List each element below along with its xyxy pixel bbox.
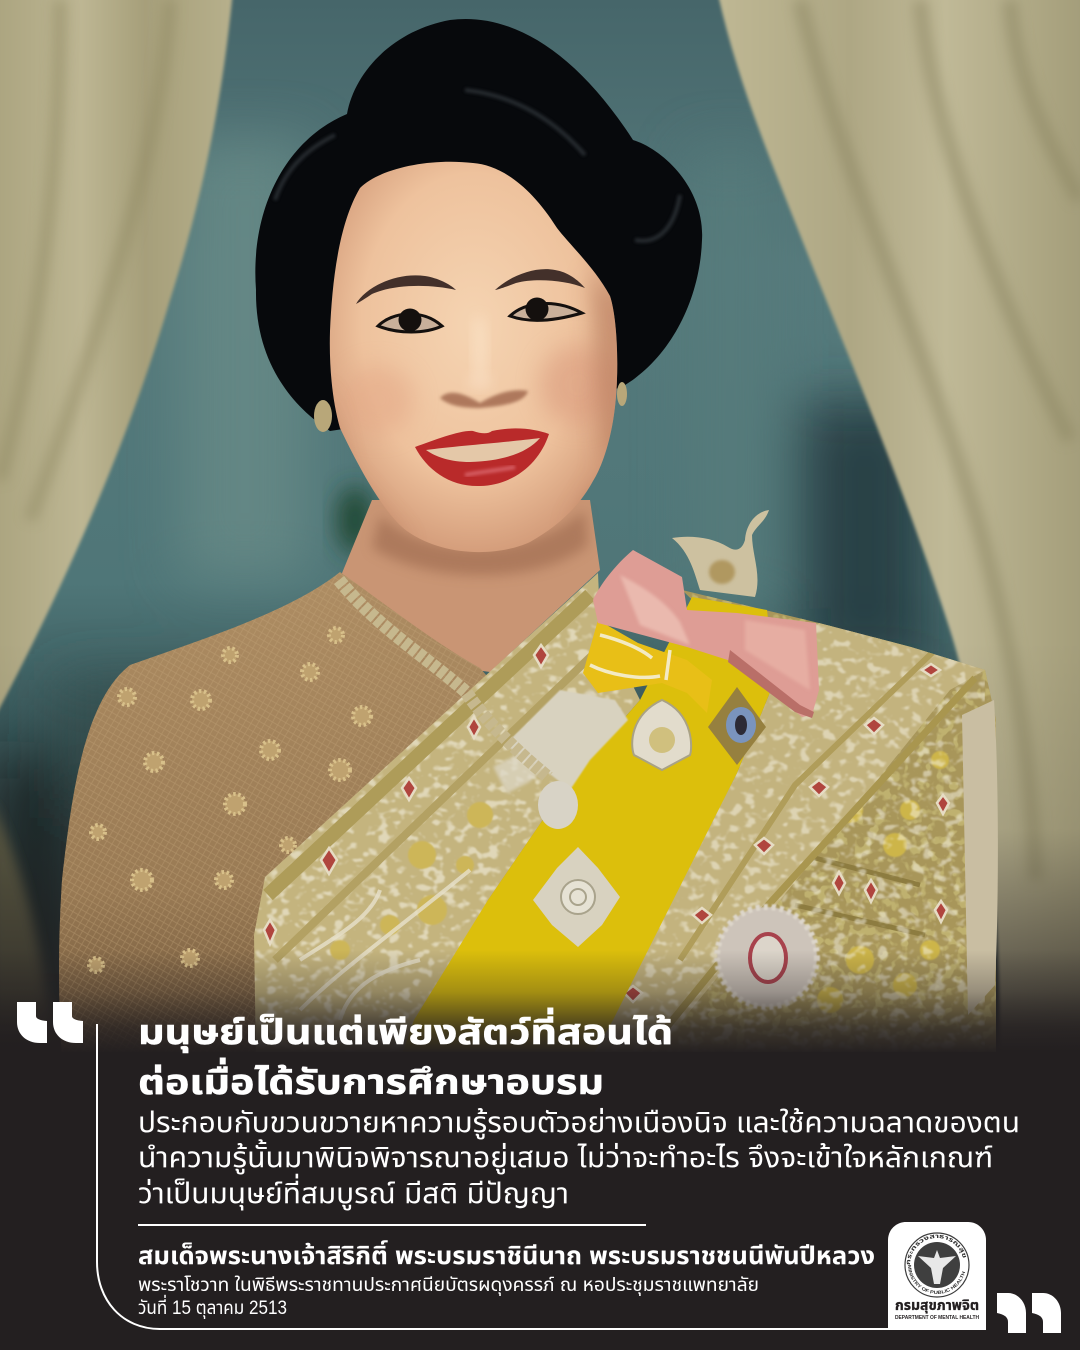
hair: highlights [275,90,680,241]
headline: ต่อเมื่อได้รับการศึกษาอบรม [138,1057,604,1102]
order ribbon: pink bow [593,550,819,717]
logo English name: DEPARTMENT OF MENTAL HEALTH [895,1315,979,1321]
dress: left drape base [254,573,640,1060]
body text [138,1107,1020,1211]
eyes [378,298,582,332]
logo seal: กระทรวงสาธารณสุข [906,1234,966,1264]
lips [415,428,549,486]
body text: ว่าเป็นมนุษย์ที่สมบูรณ์ มีสติ มีปัญญา [138,1173,569,1211]
brooch: bird texture [709,560,735,584]
medal: star decoration [533,847,620,947]
pink bow: folds [620,575,814,718]
dress: right sash panel [590,590,996,1060]
attribution details: พระราโชวาท ในพิธีพระราชทานประกาศนียบัตรผดุงครรภ์ ณ หอประชุมราชแพทยาลัย [138,1275,759,1296]
bracket frame line [97,1024,890,1329]
necklace [339,580,548,777]
background: blurred teal wall [0,0,1080,1060]
opening quote mark [17,1002,83,1043]
dress: left drape lace and embroidery [254,583,634,1032]
nose [440,316,528,408]
curtains: lower fade [0,640,1080,1060]
face: shading [340,274,618,518]
logo seal [904,1232,970,1298]
earrings [314,382,627,432]
neck [340,500,600,672]
dress: right panel texture and flowers [686,594,996,1021]
attribution details [138,1275,759,1319]
lace collar over ribbon [505,690,628,790]
dark bottom panel [0,1052,1080,1350]
background: soft light and shadow patches [0,140,930,1000]
dress: cream sleeve edge [962,700,998,1015]
divider line [138,1224,646,1226]
attribution details: วันที่ 15 ตุลาคม 2513 [138,1294,287,1319]
body text: นำความรู้นั้นมาพินิจพิจารณาอยู่เสมอ ไม่ว่าจะทำอะไร จึงจะเข้าใจหลักเกณฑ์ [138,1139,993,1175]
order ribbon: yellow bow [583,620,712,713]
order ribbon: yellow sash [400,597,775,1060]
medal: white rosette [717,907,817,1007]
medal: inner detail [649,727,675,753]
dress: blouse flowers [89,628,371,972]
brows [356,269,585,304]
photo: portrait with curtains [0,0,1080,1060]
dress: brown lace blouse [59,572,560,1060]
yellow bow: white stripes [590,635,670,680]
logo Thai name: กรมสุขภาพจิต [895,1297,979,1314]
medal: blue portrait in gold [708,687,766,765]
medal: hanging sun pendant [538,781,578,829]
logo card [888,1222,986,1330]
medal: round silver [632,700,691,770]
brooch: silver bird [672,510,769,597]
dress: right band texture [623,623,985,1038]
body text: ประกอบกับขวนขวายหาความรู้รอบตัวอย่างเนืองนิจ และใช้ความฉลาดของตน [138,1107,1020,1140]
headline [138,1007,673,1102]
curtain: left [0,0,234,745]
logo seal: MINISTRY OF PUBLIC HEALTH [908,1265,966,1294]
dress: right diagonal band [590,623,985,1060]
attribution name: สมเด็จพระนางเจ้าสิริกิติ์ พระบรมราชินีนาถ พระบรมราชชนนีพันปีหลวง [138,1239,875,1270]
logo: Department of Mental Health [888,1222,986,1330]
dress: blouse mesh [59,572,560,1060]
headline: มนุษย์เป็นแต่เพียงสัตว์ที่สอนได้ [138,1007,673,1053]
curtain: right folds [800,0,1080,880]
face [330,162,617,552]
curtain: left folds [0,0,170,520]
neck: chin shadow [372,510,588,575]
curtain: lower left drape [0,800,52,1040]
closing quote mark [997,1293,1061,1333]
dark gradient overlay [0,950,1080,1054]
background: dark green foliage by neck [337,486,373,554]
curtain: right [715,0,1080,1050]
embroidery: red motifs [264,645,949,1002]
hair: back mass [255,19,702,431]
